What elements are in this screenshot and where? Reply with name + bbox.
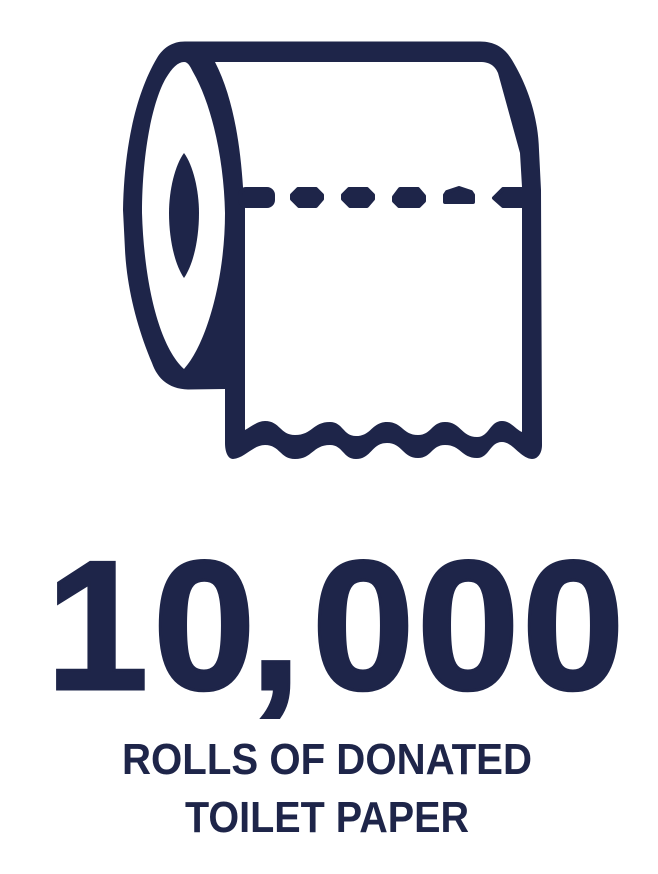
caption xyxy=(122,735,532,842)
roll and paper outline xyxy=(123,42,542,459)
big number: 10,000 xyxy=(46,522,624,728)
caption line 1: ROLLS OF DONATED xyxy=(122,735,532,784)
caption line 2: TOILET PAPER xyxy=(185,793,469,842)
roll centre hole xyxy=(169,153,199,278)
icon: toilet paper roll xyxy=(123,42,542,459)
perforation dashes xyxy=(240,188,525,206)
